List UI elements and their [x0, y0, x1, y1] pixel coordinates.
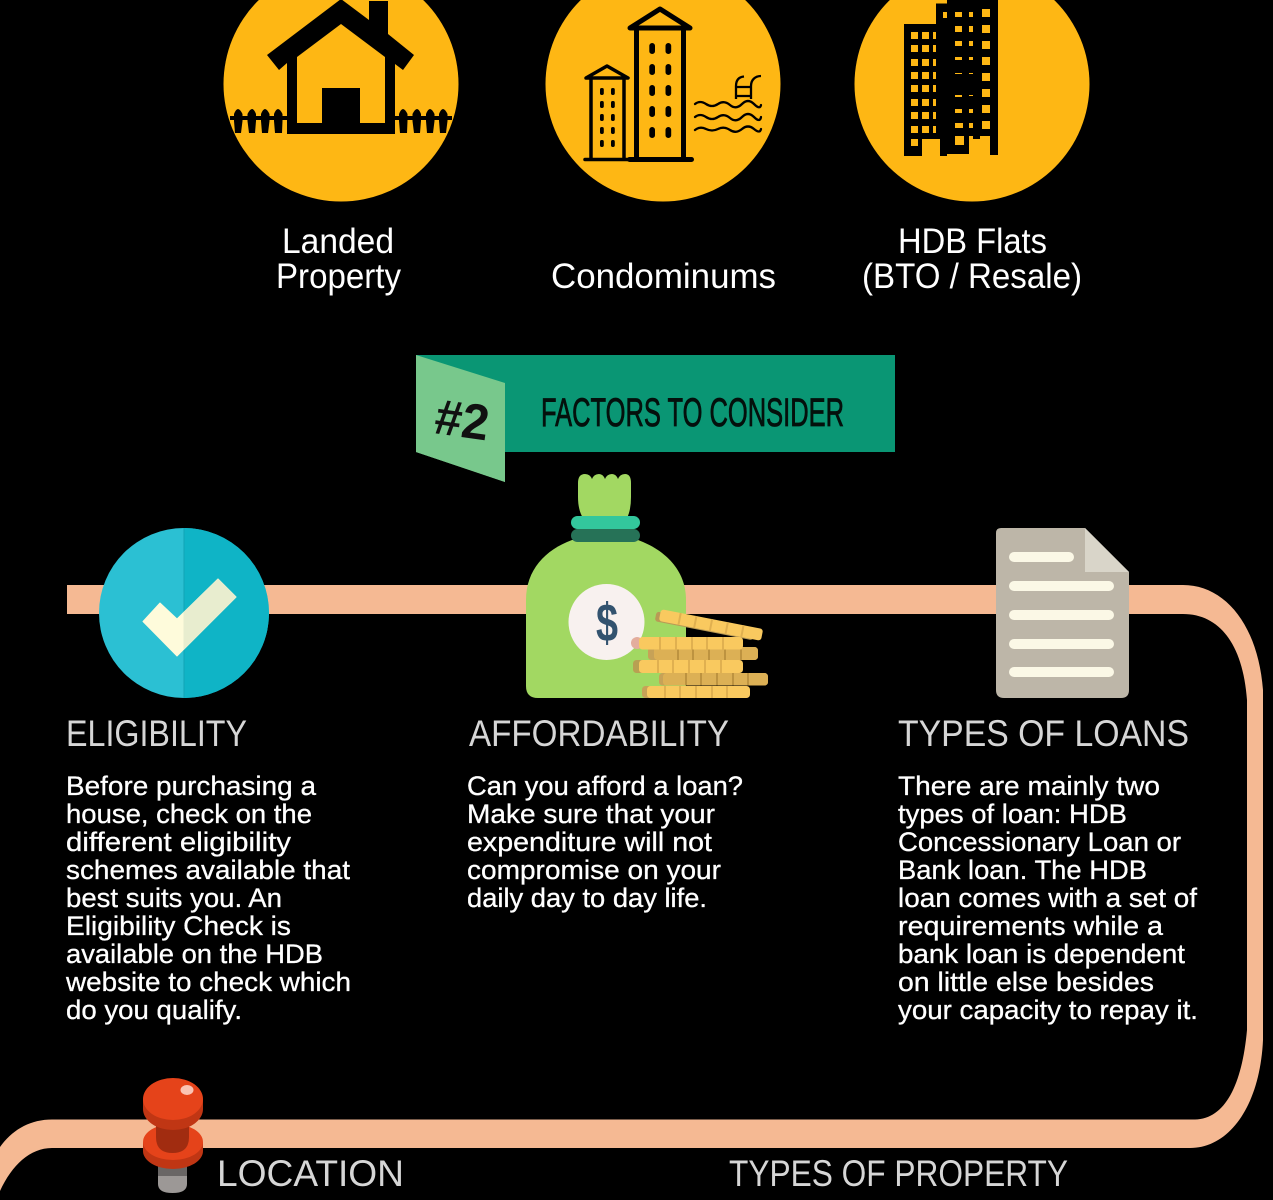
text: eligibility: website to check which — [65, 967, 351, 997]
label: HDB flats: (BTO / Resale) — [862, 257, 1082, 296]
text: eligibility: Before purchasing a — [66, 771, 317, 801]
text: eligibility: do you qualify. — [66, 995, 242, 1025]
tall tower — [630, 9, 690, 158]
section banner: factors to consider: FACTORS TO CONSIDER — [541, 391, 844, 435]
short tower — [585, 66, 630, 160]
label: HDB flats — [862, 222, 1082, 296]
heading: location: LOCATION — [217, 1153, 404, 1194]
text: types of loans: Concessionary Loan or — [898, 827, 1181, 857]
label: landed property: Landed — [282, 222, 394, 261]
icon: money bag and coins — [526, 474, 768, 698]
text: types of loans: There are mainly two — [898, 771, 1160, 801]
label: landed property — [276, 222, 401, 296]
text: types of loans: your capacity to repay it. — [898, 995, 1198, 1025]
text: types of loans — [898, 771, 1198, 1025]
icon: HDB flats — [854, 0, 1090, 202]
text: affordability — [467, 771, 743, 913]
timeline track — [0, 585, 1263, 1191]
icon: document — [996, 528, 1129, 698]
text: types of loans: on little else besides — [898, 967, 1154, 997]
section banner: factors to consider: #2 — [431, 388, 493, 451]
text: types of loans: bank loan is dependent — [898, 939, 1186, 969]
coins — [631, 608, 768, 698]
fence left — [230, 109, 287, 133]
icon: condominiums — [546, 0, 780, 202]
label: landed property: Property — [276, 257, 401, 296]
heading: types of property: TYPES OF PROPERTY — [729, 1153, 1068, 1194]
heading: types of loans: TYPES OF LOANS — [898, 713, 1189, 754]
label: condominiums: Condominums — [551, 257, 776, 296]
text: affordability: expenditure will not — [467, 827, 713, 857]
text: affordability: compromise on your — [467, 855, 721, 885]
icon: landed property — [224, 0, 458, 202]
fence right — [395, 109, 452, 133]
icon: check mark — [99, 528, 269, 698]
text: affordability: daily day to day life. — [467, 883, 707, 913]
icon: map pin — [143, 1078, 203, 1193]
text: eligibility: house, check on the — [66, 799, 312, 829]
heading: eligibility: ELIGIBILITY — [66, 713, 247, 754]
text: eligibility: different eligibility — [66, 827, 292, 857]
text: eligibility: available on the HDB — [66, 939, 323, 969]
text: eligibility — [65, 771, 351, 1025]
text: types of loans: requirements while a — [898, 911, 1164, 941]
text: affordability: Make sure that your — [467, 799, 715, 829]
text: types of loans: types of loan: HDB — [898, 799, 1127, 829]
text: eligibility: Eligibility Check is — [66, 911, 291, 941]
text: eligibility: best suits you. An — [66, 883, 282, 913]
label: HDB flats: HDB Flats — [898, 222, 1047, 261]
text: eligibility: schemes available that — [66, 855, 351, 885]
pool — [695, 76, 761, 132]
heading: affordability: AFFORDABILITY — [469, 713, 729, 754]
text: types of loans: loan comes with a set of — [898, 883, 1198, 913]
section banner: factors to consider — [400, 355, 895, 482]
icon: money bag and coins: $ — [596, 593, 618, 653]
text: types of loans: Bank loan. The HDB — [898, 855, 1147, 885]
text: affordability: Can you afford a loan? — [467, 771, 743, 801]
